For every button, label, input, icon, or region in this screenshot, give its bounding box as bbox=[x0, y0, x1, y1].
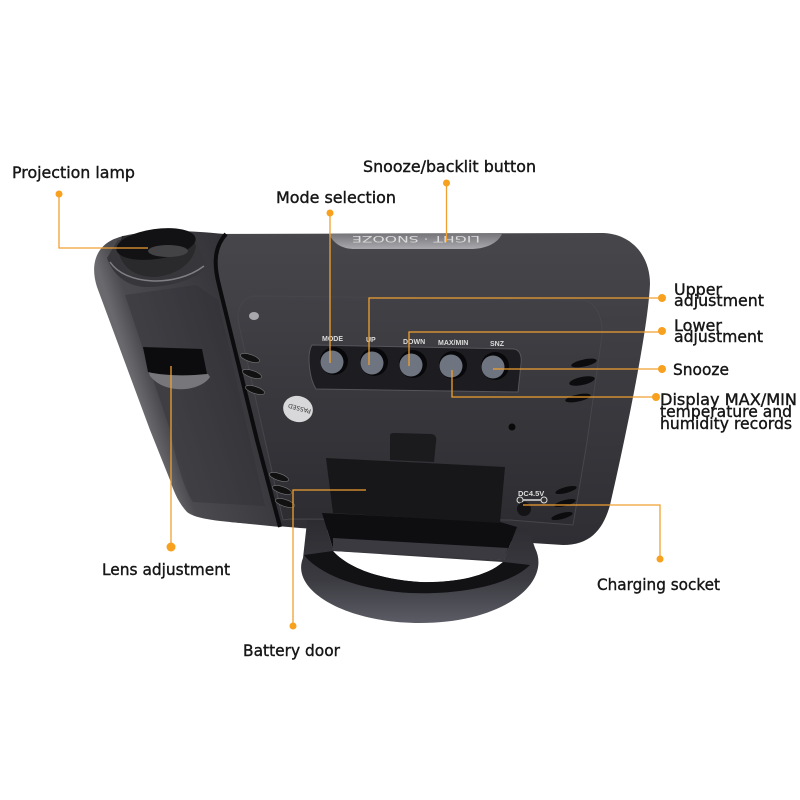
device: projection clock rear bbox=[94, 224, 650, 623]
button labels: MODE bbox=[322, 336, 343, 343]
button labels: DOWN bbox=[403, 339, 425, 346]
left vent slots bbox=[239, 352, 296, 509]
callout: lower adjustment bbox=[409, 316, 763, 366]
callout: snooze/backlit button bbox=[363, 157, 536, 242]
focus wheel bbox=[143, 347, 210, 389]
callout: charging socket: Charging socket bbox=[597, 575, 720, 594]
callout: battery door: Battery door bbox=[243, 641, 340, 660]
stand hinge bbox=[322, 513, 517, 560]
rear panel bbox=[238, 296, 602, 525]
panel highlight bbox=[249, 312, 259, 320]
QC sticker bbox=[280, 393, 316, 425]
callout: mode selection: Mode selection bbox=[276, 188, 396, 207]
callout: mode selection bbox=[276, 188, 396, 363]
callout: display max/min records: Display MAX/MIN bbox=[660, 390, 797, 409]
callout: snooze/backlit button: Snooze/backlit button bbox=[363, 157, 536, 176]
callout: upper adjustment bbox=[369, 280, 764, 365]
reset hole bbox=[508, 424, 516, 430]
callout: upper adjustment: adjustment bbox=[674, 291, 764, 310]
battery door latch bbox=[390, 433, 436, 462]
DC socket bbox=[517, 489, 547, 516]
column separator bbox=[216, 234, 280, 527]
battery door bbox=[326, 458, 505, 523]
stand hinge strip bbox=[333, 538, 508, 560]
callout: lower adjustment: adjustment bbox=[674, 327, 763, 346]
main body bbox=[190, 233, 650, 545]
callout: charging socket bbox=[523, 505, 720, 594]
right vent slots bbox=[551, 357, 597, 522]
callout: lens adjustment bbox=[102, 366, 230, 579]
column recess bbox=[125, 285, 265, 506]
callout: projection lamp: Projection lamp bbox=[12, 163, 135, 182]
button labels: SNZ bbox=[490, 341, 505, 348]
callout: lens adjustment: Lens adjustment bbox=[102, 560, 230, 579]
lamp lens bbox=[107, 224, 206, 287]
QC sticker: PASSED bbox=[287, 401, 312, 414]
button labels: MAX/MIN bbox=[438, 340, 468, 347]
button recess bbox=[309, 345, 521, 392]
callout: snooze bbox=[493, 360, 729, 379]
DC socket: DC4.5V bbox=[518, 489, 544, 498]
callout: projection lamp bbox=[12, 163, 148, 248]
top label plate: LIGHT · SNOOZE bbox=[351, 233, 480, 243]
button labels: UP bbox=[366, 337, 376, 344]
callout: lower adjustment: Lower bbox=[674, 316, 722, 335]
callout: battery door bbox=[243, 490, 366, 660]
callout: display max/min records: humidity records bbox=[660, 414, 792, 433]
top label plate bbox=[329, 233, 502, 249]
button shadows bbox=[320, 347, 509, 380]
callout: upper adjustment: Upper bbox=[674, 280, 722, 299]
buttons bbox=[320, 350, 504, 378]
stand bbox=[301, 513, 538, 623]
callout: snooze: Snooze bbox=[673, 360, 729, 379]
button labels bbox=[322, 336, 505, 348]
callout: display max/min records: temperature and bbox=[660, 402, 792, 421]
callout: display max/min records bbox=[452, 370, 797, 433]
lamp column bbox=[94, 231, 280, 527]
